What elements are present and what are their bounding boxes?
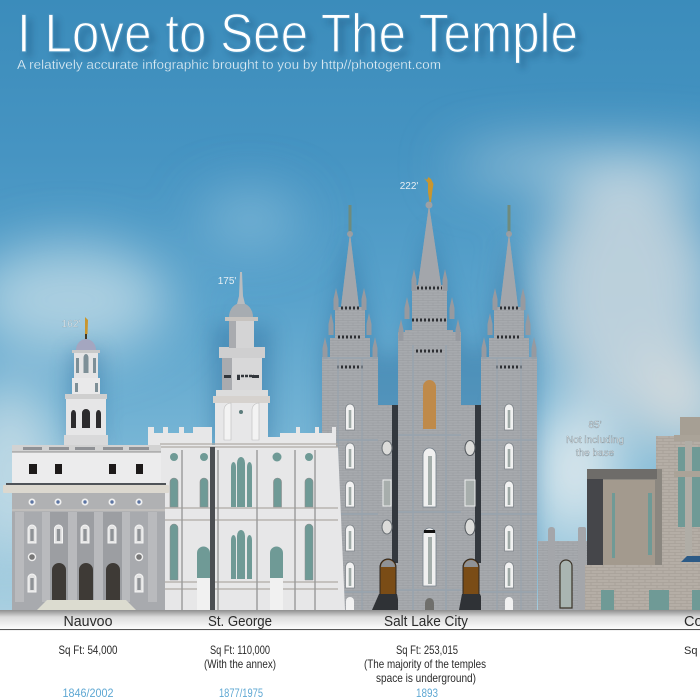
column: St. George: (With the annex) bbox=[204, 657, 276, 671]
column: St. George: 1877/1975 bbox=[219, 686, 263, 700]
column: St. George bbox=[204, 614, 276, 700]
temple: Salt Lake City bbox=[322, 177, 587, 610]
left tower bbox=[322, 205, 378, 610]
infographic canvas: I Love to See The Temple bbox=[17, 2, 578, 64]
temple: St. George bbox=[148, 272, 345, 610]
centre tower bbox=[398, 177, 461, 610]
column: Salt Lake City: Sq Ft: 253,015 bbox=[396, 643, 458, 657]
height label: Conference Center: the base bbox=[576, 448, 615, 459]
column: Salt Lake City bbox=[364, 614, 486, 700]
height label: Salt Lake City: 222' bbox=[400, 181, 418, 192]
golden statue bbox=[85, 317, 88, 334]
column: Salt Lake City: (The majority of the temples bbox=[364, 657, 486, 671]
connecting wall left bbox=[372, 405, 400, 610]
title: I Love to See The Temple bbox=[22, 7, 583, 69]
column: Nauvoo: Nauvoo bbox=[64, 614, 112, 630]
column: St. George: St. George bbox=[208, 614, 272, 630]
footer band bbox=[0, 610, 700, 700]
column: Salt Lake City: 1893 bbox=[416, 686, 438, 700]
column: Nauvoo bbox=[58, 614, 118, 700]
column: Nauvoo: 1846/2002 bbox=[62, 686, 114, 700]
temple: Nauvoo bbox=[3, 317, 169, 610]
bell tower bbox=[64, 435, 108, 445]
column: Salt Lake City: space is underground) bbox=[376, 671, 476, 685]
lower stone storey bbox=[12, 492, 165, 610]
subtitle: A relatively accurate infographic brought to you by http//photogent.com bbox=[17, 57, 441, 72]
height label: Conference Center: 85' bbox=[588, 420, 602, 431]
building shadow halo bbox=[70, 225, 534, 600]
height label: Nauvoo: 162' bbox=[62, 319, 80, 330]
upper white storey bbox=[12, 452, 161, 484]
right tower bbox=[481, 205, 537, 610]
height label: St. George: 175' bbox=[218, 276, 236, 287]
height label: Conference Center: Not including bbox=[566, 435, 624, 446]
column: Nauvoo: Sq Ft: 54,000 bbox=[58, 643, 118, 657]
annex wall bbox=[538, 527, 587, 610]
temple: Conference Center bbox=[585, 417, 700, 610]
column: St. George: Sq Ft: 110,000 bbox=[210, 643, 270, 657]
column: Salt Lake City: Salt Lake City bbox=[384, 614, 469, 630]
column: Conference Center (cropped): Sq bbox=[684, 645, 697, 657]
connecting wall right bbox=[459, 405, 487, 610]
golden statue bbox=[424, 177, 434, 202]
column: Conference Center (cropped) bbox=[684, 614, 700, 657]
height label: Conference Center bbox=[566, 420, 624, 459]
